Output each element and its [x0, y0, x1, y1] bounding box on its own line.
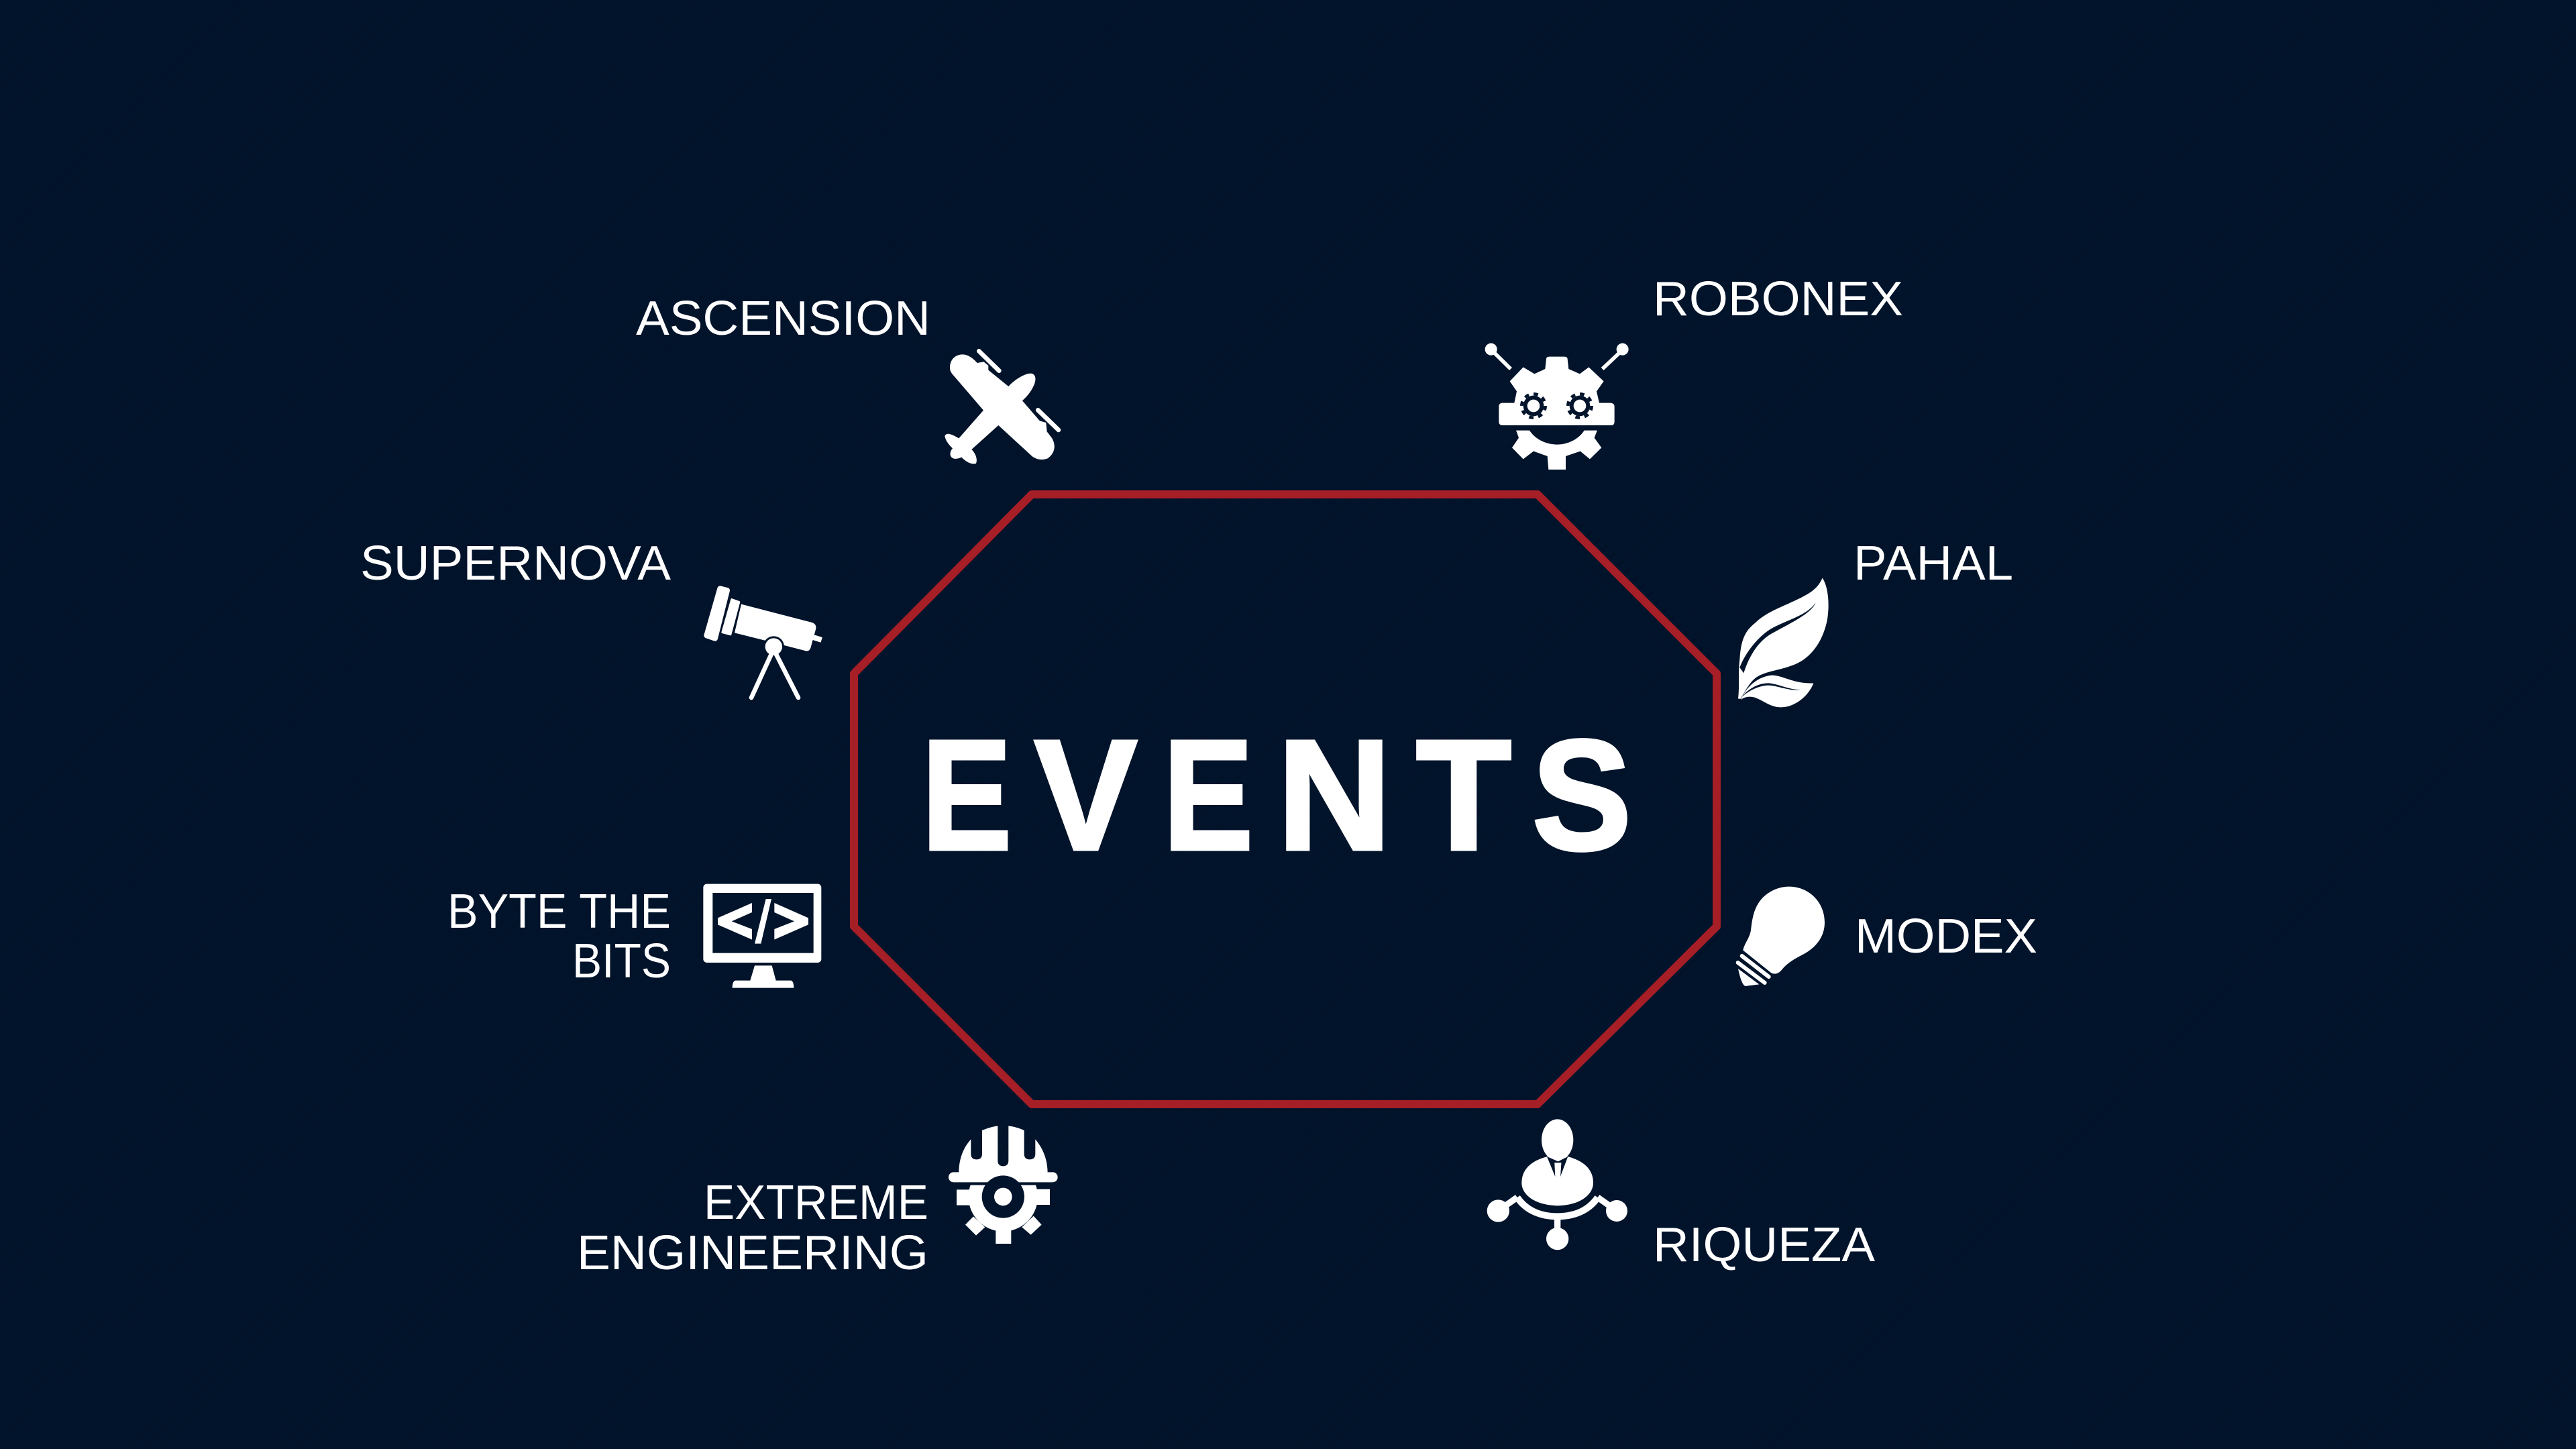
label: Supernova: SUPERNOVA [360, 537, 671, 590]
label: Ascension: ASCENSION [636, 292, 930, 345]
panel: red octagon [854, 494, 1717, 1104]
icon: telescope [706, 588, 822, 698]
title: V [1034, 707, 1137, 883]
label: Extreme Engineering: ENGINEERING [577, 1226, 928, 1280]
icon: helmet and gear [949, 1126, 1058, 1244]
icon: light bulb [1738, 887, 1825, 986]
title: E [922, 707, 1012, 883]
label: Byte the Bits: BYTE THE [447, 885, 671, 938]
label: Modex: MODEX [1855, 910, 2037, 963]
icon: airplane [945, 351, 1059, 464]
icon: robot gear [1485, 343, 1629, 470]
icon: leaf [1738, 578, 1829, 707]
label: Extreme Engineering: EXTREME [704, 1176, 928, 1230]
label: Extreme Engineering [577, 1176, 928, 1280]
icon: person network [1487, 1119, 1627, 1250]
title: E [1163, 707, 1253, 883]
label: Byte the Bits [447, 885, 671, 988]
icon: code monitor [703, 884, 821, 988]
label: Robonex: ROBONEX [1653, 272, 1903, 326]
label: Pahal: PAHAL [1854, 537, 2013, 590]
title: T [1416, 707, 1511, 883]
label: Byte the Bits: BITS [572, 934, 671, 988]
title: N [1277, 707, 1391, 883]
label: Riqueza: RIQUEZA [1653, 1218, 1875, 1272]
title: S [1532, 707, 1631, 883]
